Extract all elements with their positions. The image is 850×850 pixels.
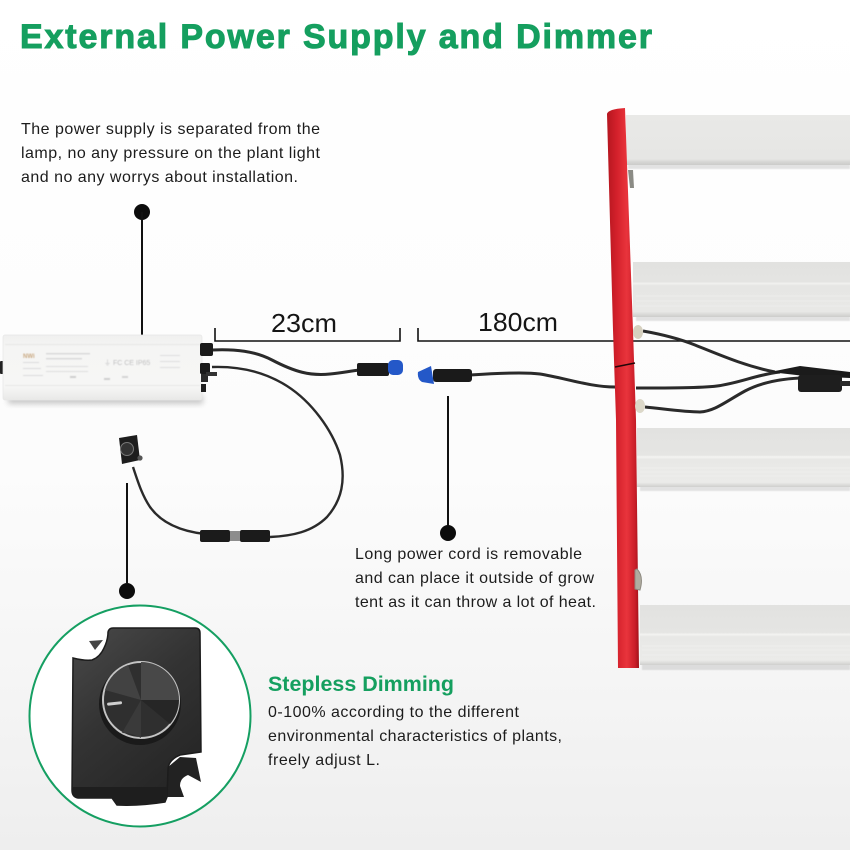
callout line: dimmer (119, 483, 135, 599)
title: External Power Supply and Dimmer (20, 18, 652, 56)
callout line: power supply (134, 204, 150, 351)
dimmer base (72, 787, 167, 805)
dimension: 23cm: 23cm (271, 308, 337, 338)
text block: dimming description (268, 704, 562, 769)
text block: power cord note: tent as it can throw a lot of heat. (355, 594, 596, 611)
text block: power supply note: and no any worrys about installation. (21, 169, 298, 186)
small dimmer in photo (119, 435, 143, 464)
dimmer ear top left (89, 640, 103, 650)
red side rail (607, 108, 645, 668)
text block: power supply note: The power supply is separated from the (21, 121, 320, 138)
dimmer ear bottom right (167, 757, 201, 797)
knob (99, 663, 181, 745)
heading: stepless dimming: Stepless Dimming (268, 673, 454, 696)
dimension: 23cm (215, 308, 400, 341)
text block: dimming description: 0-100% according to the different (268, 704, 520, 721)
text block: power cord note: Long power cord is removable (355, 546, 582, 563)
text block: dimming description: environmental characteristics of plants, (268, 728, 562, 745)
cable: power supply to dimmer (133, 363, 343, 542)
dimmer body (72, 628, 201, 805)
cable: power output to blue connector (200, 343, 403, 376)
dimmer magnified circle (30, 606, 250, 826)
text block: dimming description: freely adjust L. (268, 752, 380, 769)
text block: power supply note: lamp, no any pressure on the plant light (21, 145, 321, 162)
power supply unit (0, 335, 203, 404)
text block: power supply note (21, 121, 321, 186)
LED light bars (626, 115, 850, 670)
text block: power cord note (355, 546, 596, 611)
cable: 180cm power cord (418, 331, 850, 412)
dimension: 180cm (418, 307, 850, 341)
power supply unit: NWi (23, 354, 35, 360)
power supply unit: ⏚ FC CE IP65 (104, 359, 150, 367)
text block: power cord note: and can place it outside of grow (355, 570, 594, 587)
callout line: power cord (440, 396, 456, 541)
dimension: 180cm: 180cm (478, 307, 558, 337)
